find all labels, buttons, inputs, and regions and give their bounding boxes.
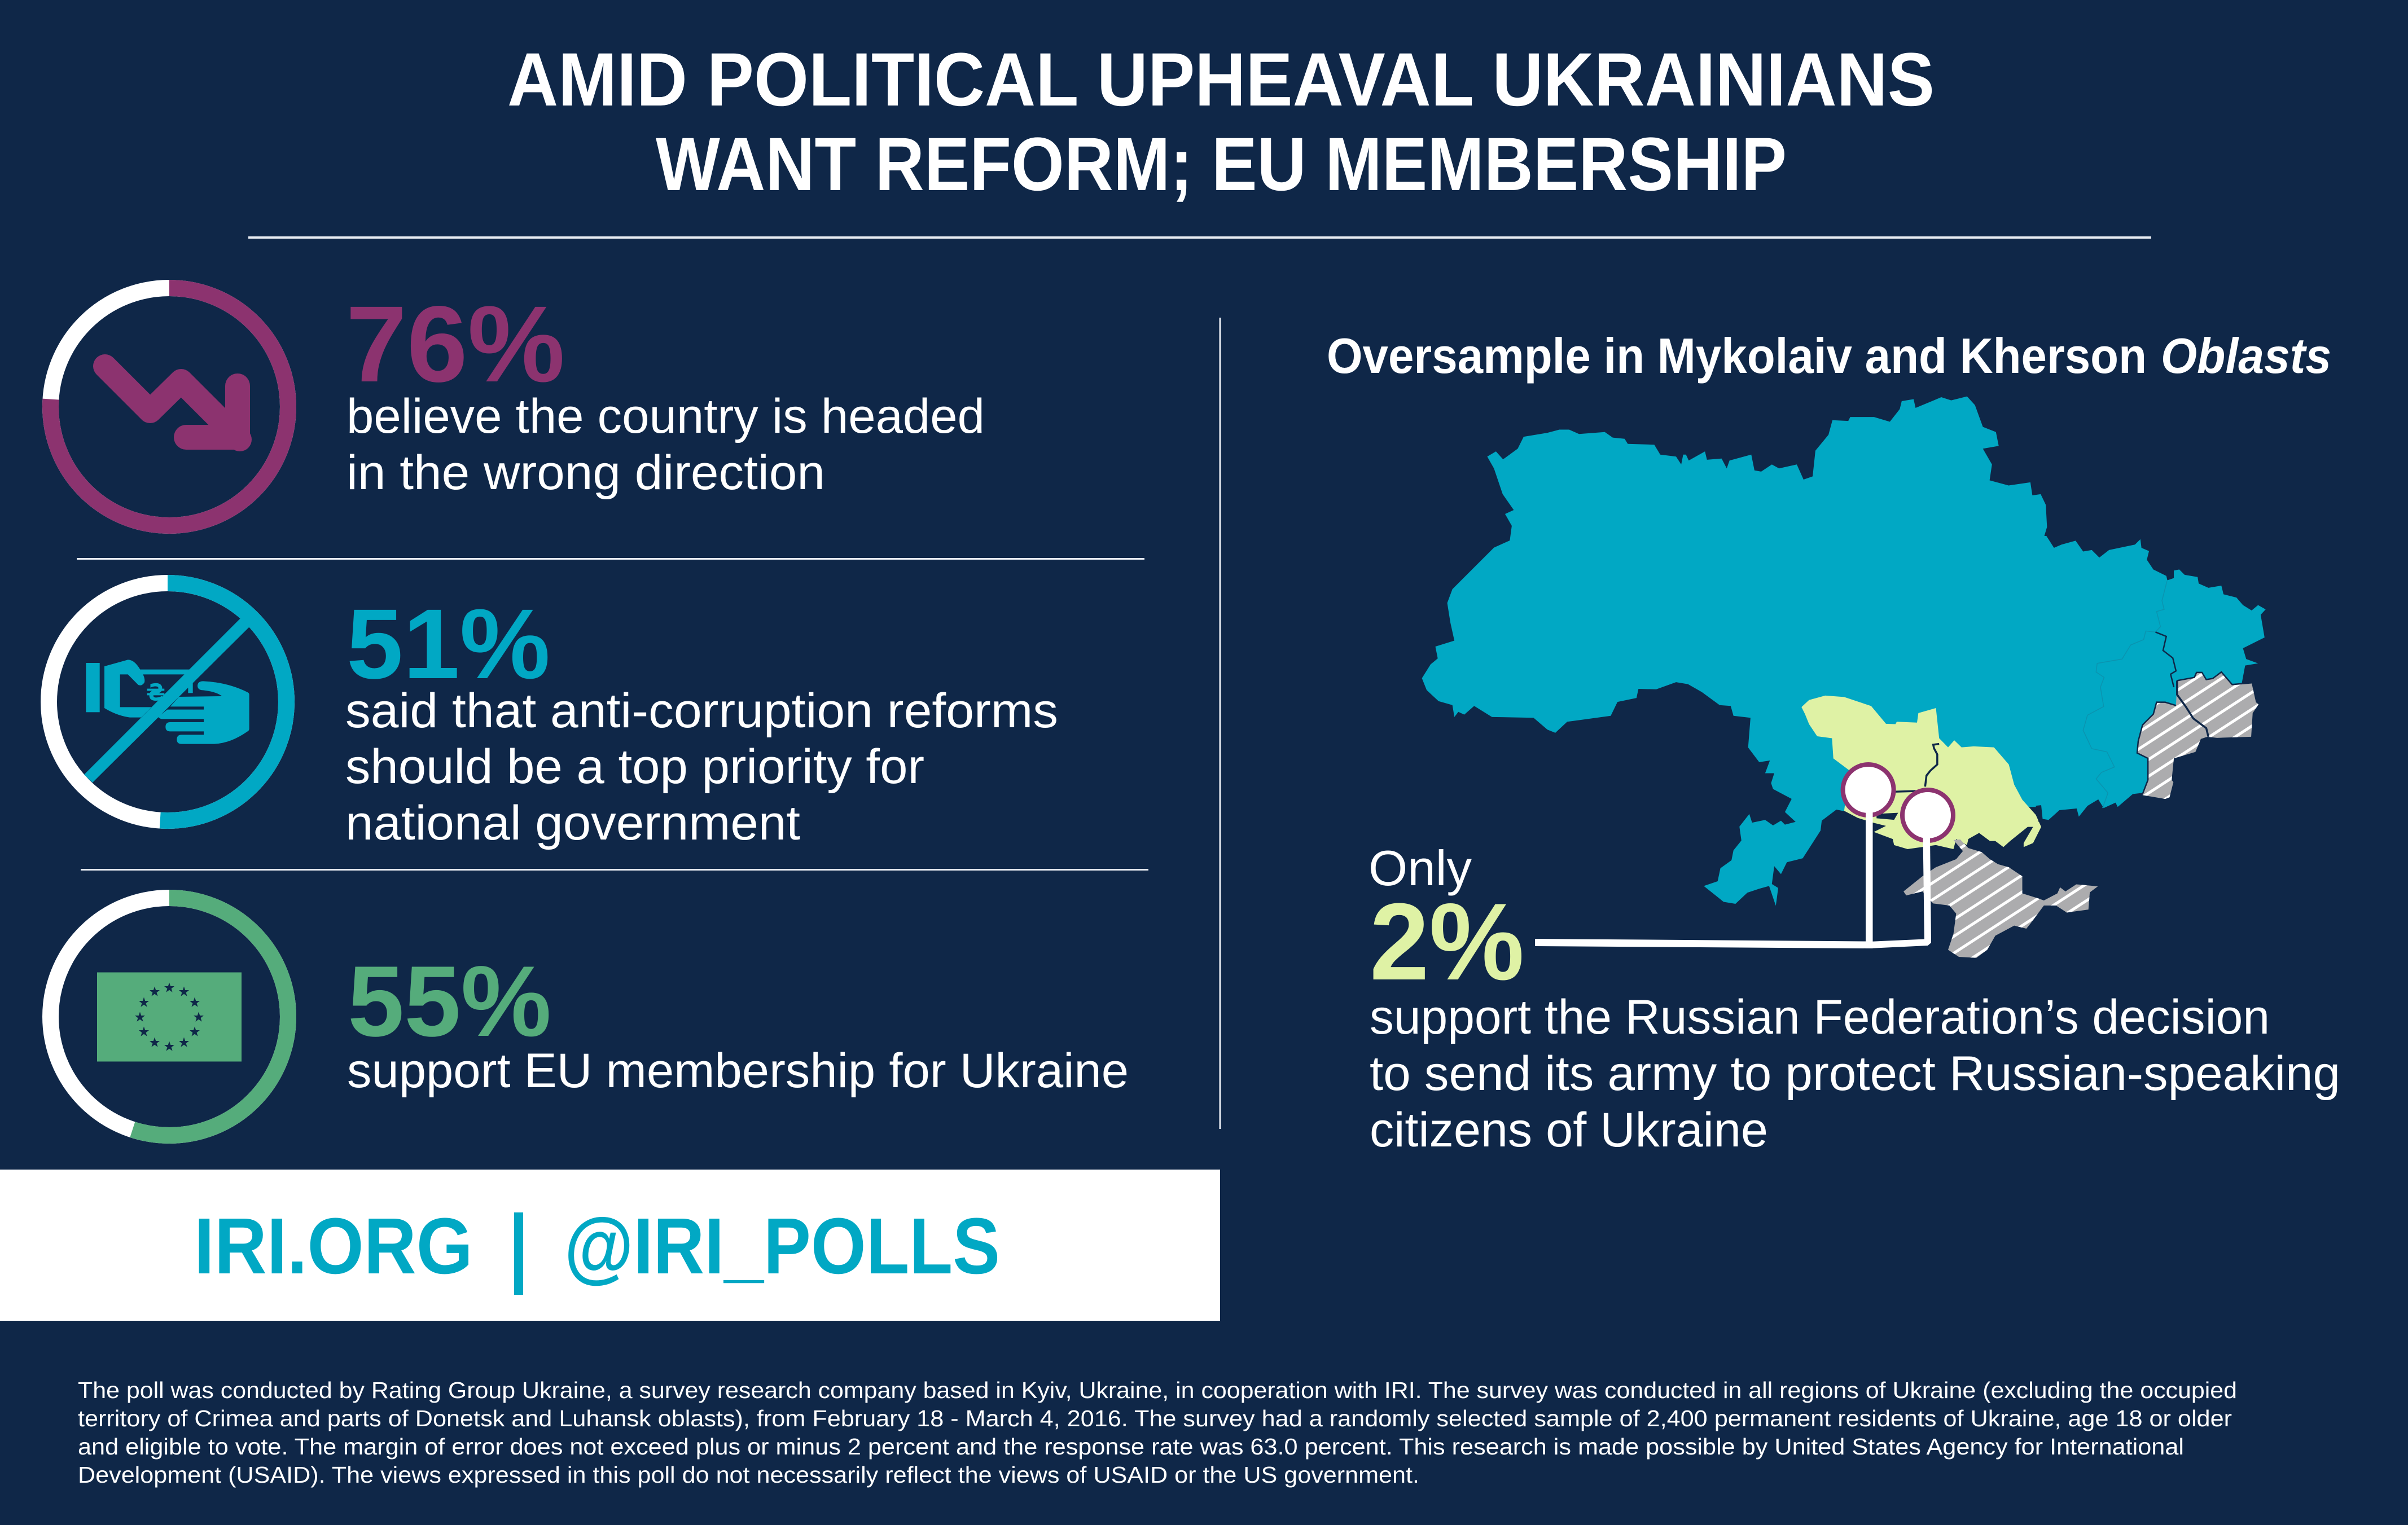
text: methodology footnote: territory of Crimea and parts of Donetsk and Luhansk oblasts), from February 18 - March 4, 2016. The survey had a randomly selected sample of 2,400 permanent residents of Ukraine, age 18 or older xyxy=(78,1405,2232,1431)
map: Donetsk and Luhansk hatched xyxy=(2136,672,2259,799)
stat: 51%: 51% xyxy=(346,589,550,700)
text: wrong direction description: in the wrong direction xyxy=(346,446,825,500)
panel: anti-corruption stat xyxy=(49,583,1058,850)
map: Crimea hatched xyxy=(1903,839,2098,958)
title: AMID POLITICAL UPHEAVAL UKRAINIANS xyxy=(507,38,1935,122)
text: anti-corruption description: said that anti-corruption reforms xyxy=(345,684,1058,738)
text: EU membership description: support EU membership for Ukraine xyxy=(347,1044,1129,1098)
text: Russian support description: citizens of Ukraine xyxy=(1370,1103,1768,1157)
panel: Russian support stat xyxy=(1369,840,2340,1157)
map: main territory xyxy=(1422,397,2266,906)
text: Russian support description: support the Russian Federation’s decision xyxy=(1370,990,2270,1044)
map: oblast boundaries xyxy=(2083,581,2176,808)
text: anti-corruption description xyxy=(345,684,1058,850)
text: methodology footnote: Development (USAID). The views expressed in this poll do not necessarily reflect the views of USAID or the US government. xyxy=(78,1462,1419,1488)
panel: white contact bar xyxy=(0,1170,1220,1321)
text: anti-corruption description: should be a top priority for xyxy=(345,740,924,794)
panel: wrong direction stat xyxy=(51,283,985,526)
title xyxy=(507,38,1935,206)
panel: oversample map heading: Oblasts xyxy=(2161,328,2331,384)
arrow: connector lines to 2% xyxy=(1535,812,1931,948)
text: methodology footnote: The poll was conducted by Rating Group Ukraine, a survey research company based in Kyiv, Ukraine, in cooperation with IRI. The survey was conducted in all regions of Ukraine (excluding the occupied xyxy=(78,1377,2237,1403)
text: Russian support description: to send its army to protect Russian-speaking xyxy=(1370,1047,2340,1101)
text: methodology footnote: and eligible to vote. The margin of error does not exceed plus or minus 2 percent and the response rate was 63.0 percent. This research is made possible by United States Agency for International xyxy=(78,1434,2184,1460)
stat: 2%: 2% xyxy=(1370,881,1524,1003)
divider bar xyxy=(514,1212,523,1295)
icon: bribe crossed out in 51% ring xyxy=(49,583,287,820)
text: Russian support description xyxy=(1370,990,2340,1157)
title: WANT REFORM; EU MEMBERSHIP xyxy=(656,122,1787,206)
stat: 76%: 76% xyxy=(346,283,565,405)
text: wrong direction description: believe the country is headed xyxy=(346,389,985,443)
icon: bribe crossed out in 51% ring: ₴ xyxy=(146,679,165,706)
map: Mykolaiv and Kherson oblasts xyxy=(1801,696,2043,849)
icon: EU flag in 55% ring xyxy=(51,898,288,1135)
text: methodology footnote xyxy=(78,1377,2237,1488)
icon: falling arrow in 76% ring xyxy=(51,288,288,526)
stat: 55%: 55% xyxy=(348,945,551,1057)
map: Ukraine xyxy=(1422,397,2266,958)
panel: oversample map heading: Oversample in Mykolaiv and Kherson xyxy=(1327,328,2147,384)
text: anti-corruption description: national government xyxy=(345,796,800,850)
marker: Kherson pin xyxy=(1902,790,1953,841)
panel: EU membership stat xyxy=(51,898,1129,1135)
text: Only: Only xyxy=(1369,840,1472,896)
text: wrong direction description xyxy=(346,389,985,500)
text: handle: @IRI_POLLS xyxy=(564,1201,1000,1290)
text: website: IRI.ORG xyxy=(194,1201,473,1290)
marker: Mykolaiv pin xyxy=(1843,764,1894,815)
